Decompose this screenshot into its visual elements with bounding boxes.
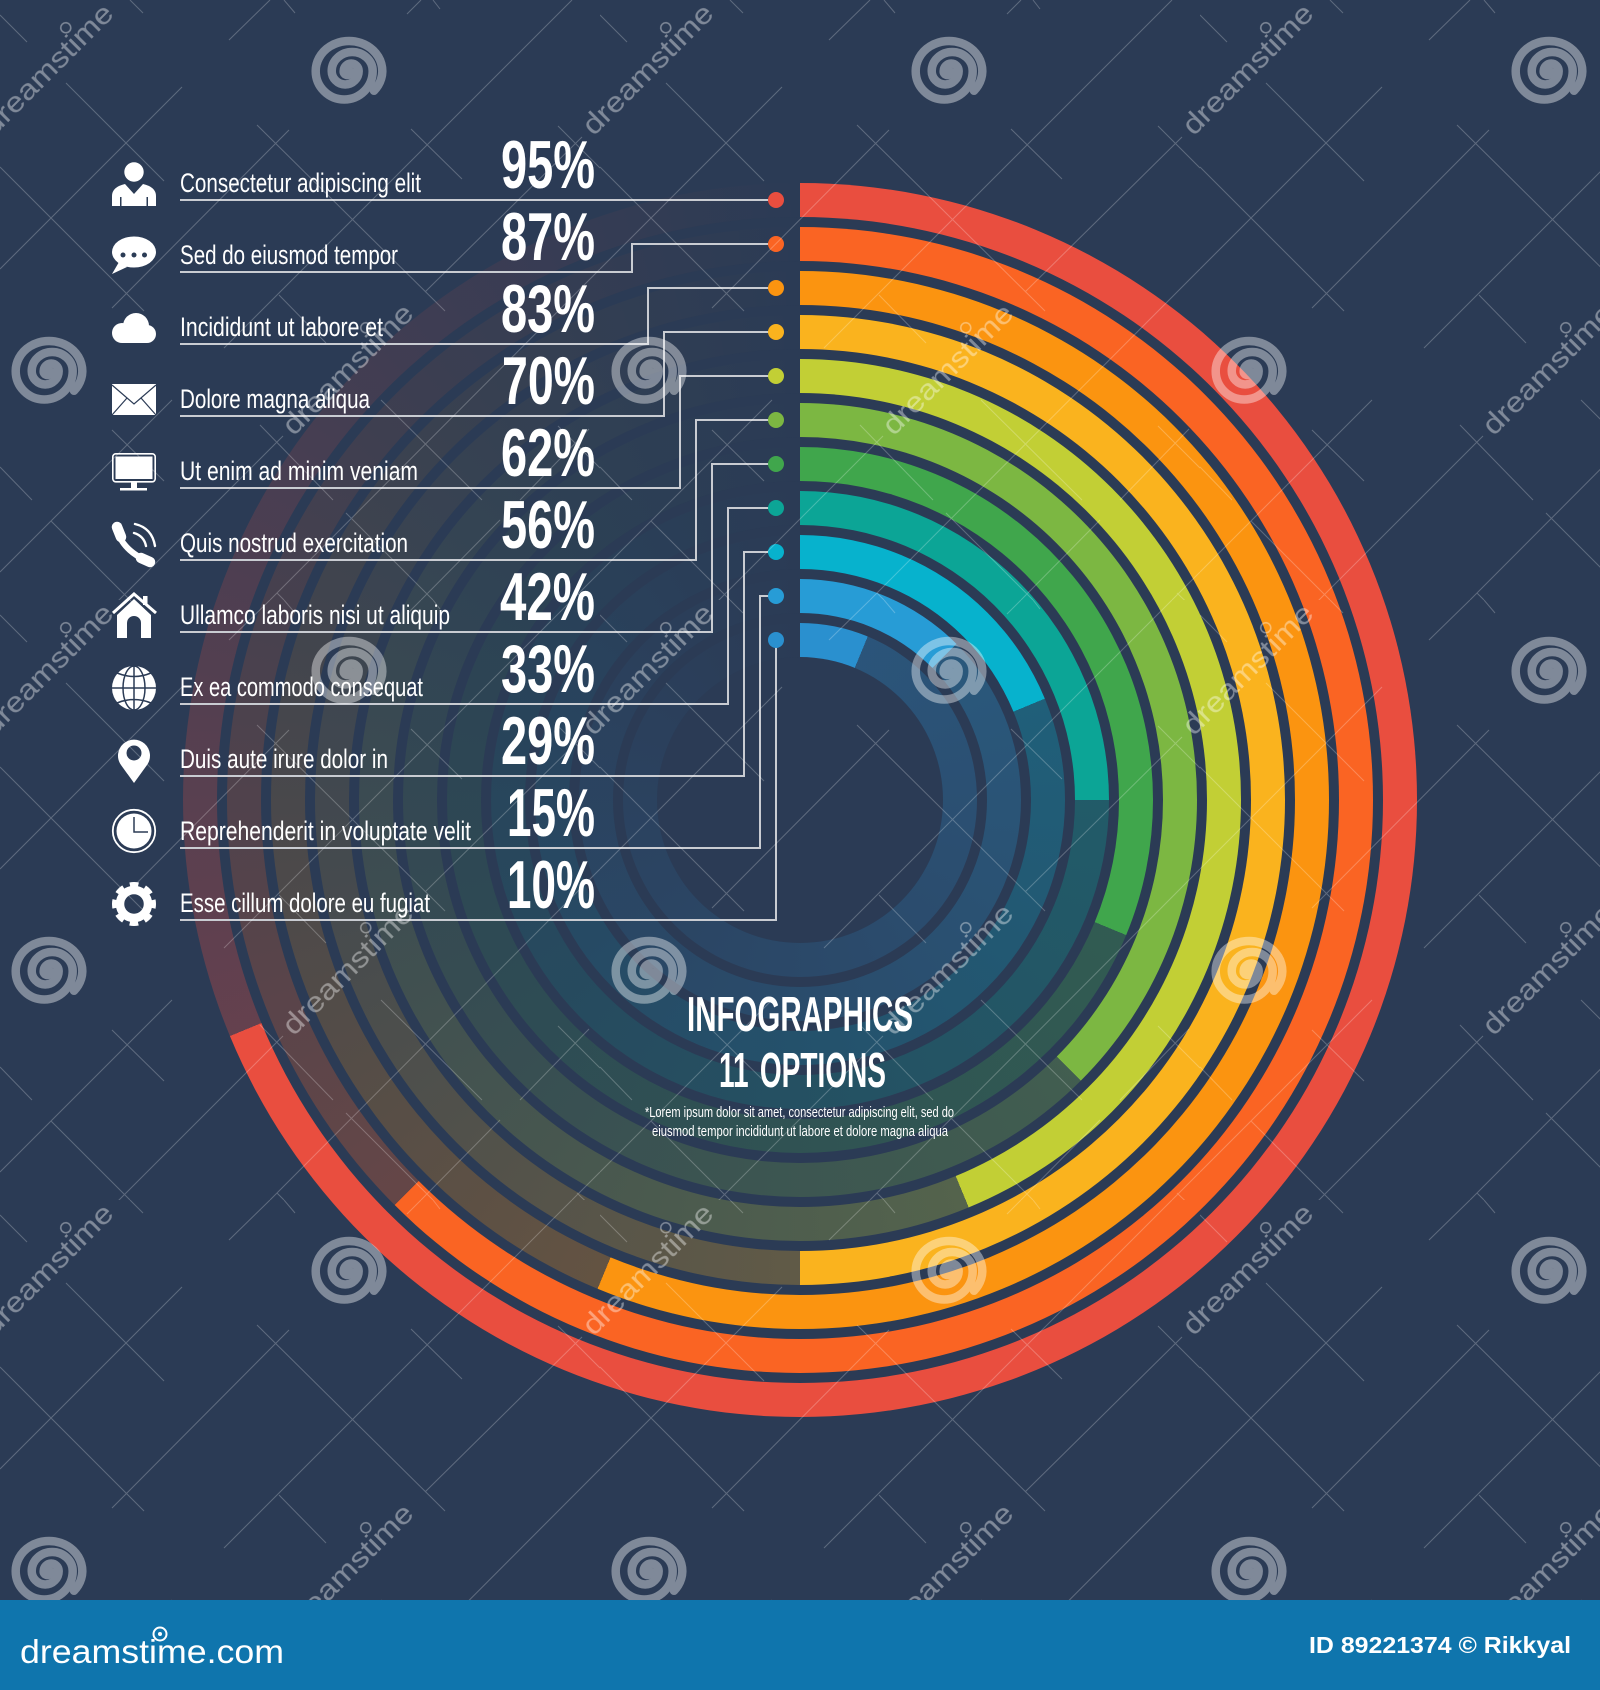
value 62%: 62% (501, 415, 595, 491)
watermark text: dreamstime (576, 597, 720, 742)
icon: phone (117, 524, 155, 562)
connector lines (180, 200, 776, 920)
label 7: Ullamco laboris nisi ut aliquip (180, 600, 450, 630)
percentages column (500, 127, 595, 923)
connector dots (768, 192, 784, 648)
caption text: *Lorem ipsum dolor sit amet, consectetur adipiscing elit, sed do (645, 1105, 954, 1121)
label 1: Consectetur adipiscing elit (180, 168, 421, 198)
icon: clock (113, 810, 155, 852)
value 42%: 42% (500, 559, 595, 635)
watermark text: dreamstime (276, 297, 420, 442)
label 11: Esse cillum dolore eu fugiat (180, 888, 430, 918)
ring 3: 83% orange (271, 271, 1329, 1329)
watermark text: dreamstime (1176, 1197, 1320, 1342)
icon: gear (114, 884, 154, 924)
watermark text: dreamstime (276, 1497, 420, 1642)
icon: speech bubble (112, 236, 156, 274)
watermark text: dreamstime (276, 897, 420, 1042)
value 83%: 83% (501, 271, 595, 347)
icon: person (112, 162, 156, 206)
ring 9: 29% cyan (535, 535, 1065, 1065)
caption text: eiusmod tempor incididunt ut labore et dolore magna aliqua (652, 1124, 949, 1140)
icon: location pin (118, 740, 150, 783)
ring 4: 70% amber (315, 315, 1285, 1285)
value 95%: 95% (501, 127, 595, 203)
ring 2: 87% orange-red (227, 227, 1373, 1373)
watermark text: dreamstime (876, 1497, 1020, 1642)
labels column (180, 168, 471, 918)
label 8: Ex ea commodo consequat (180, 672, 423, 702)
footer credit: ID 89221374 © Rikkyal (1309, 1632, 1571, 1658)
chart: concentric progress rings (183, 183, 1417, 1417)
label 5: Ut enim ad minim veniam (180, 456, 418, 486)
watermark text: dreamstime (576, 0, 720, 142)
label 9: Duis aute irure dolor in (180, 744, 388, 774)
ring 1: 95% red (183, 183, 1417, 1417)
icon: envelope (112, 384, 156, 415)
label 10: Reprehenderit in voluptate velit (180, 816, 471, 846)
icon: globe (112, 666, 156, 710)
value 29%: 29% (501, 703, 595, 779)
ring 7: 42% green (447, 447, 1153, 1153)
value 15%: 15% (507, 775, 595, 851)
label 4: Dolore magna aliqua (180, 384, 371, 414)
icon: monitor (113, 454, 155, 490)
watermark text: dreamstime (876, 897, 1020, 1042)
label 6: Quis nostrud exercitation (180, 528, 408, 558)
footer bar (0, 1600, 1600, 1690)
value 10%: 10% (507, 847, 595, 923)
ring 11: 10% blue (623, 623, 977, 977)
label 3: Incididunt ut labore et (180, 312, 383, 342)
title: INFOGRAPHICS (687, 988, 913, 1042)
title: 11 OPTIONS (719, 1044, 886, 1098)
ring 6: 56% light green (403, 403, 1197, 1197)
icon: house (113, 594, 156, 638)
value 70%: 70% (502, 343, 595, 419)
watermark text: dreamstime (1176, 0, 1320, 142)
label 2: Sed do eiusmod tempor (180, 240, 398, 270)
icon: cloud (112, 313, 156, 343)
ring 8: 33% teal (491, 491, 1109, 1109)
ring 5: 62% lime (359, 359, 1241, 1241)
watermark text: dreamstime (876, 297, 1020, 442)
value 87%: 87% (501, 199, 595, 275)
watermark text: dreamstime (576, 1197, 720, 1342)
watermark text: dreamstime (1176, 597, 1320, 742)
footer logo: dreamstime.com (20, 1633, 284, 1670)
caption text (645, 1105, 954, 1140)
value 33%: 33% (501, 631, 595, 707)
value 56%: 56% (501, 487, 595, 563)
title (687, 988, 913, 1098)
ring 10: 15% sky blue (579, 579, 1021, 1021)
